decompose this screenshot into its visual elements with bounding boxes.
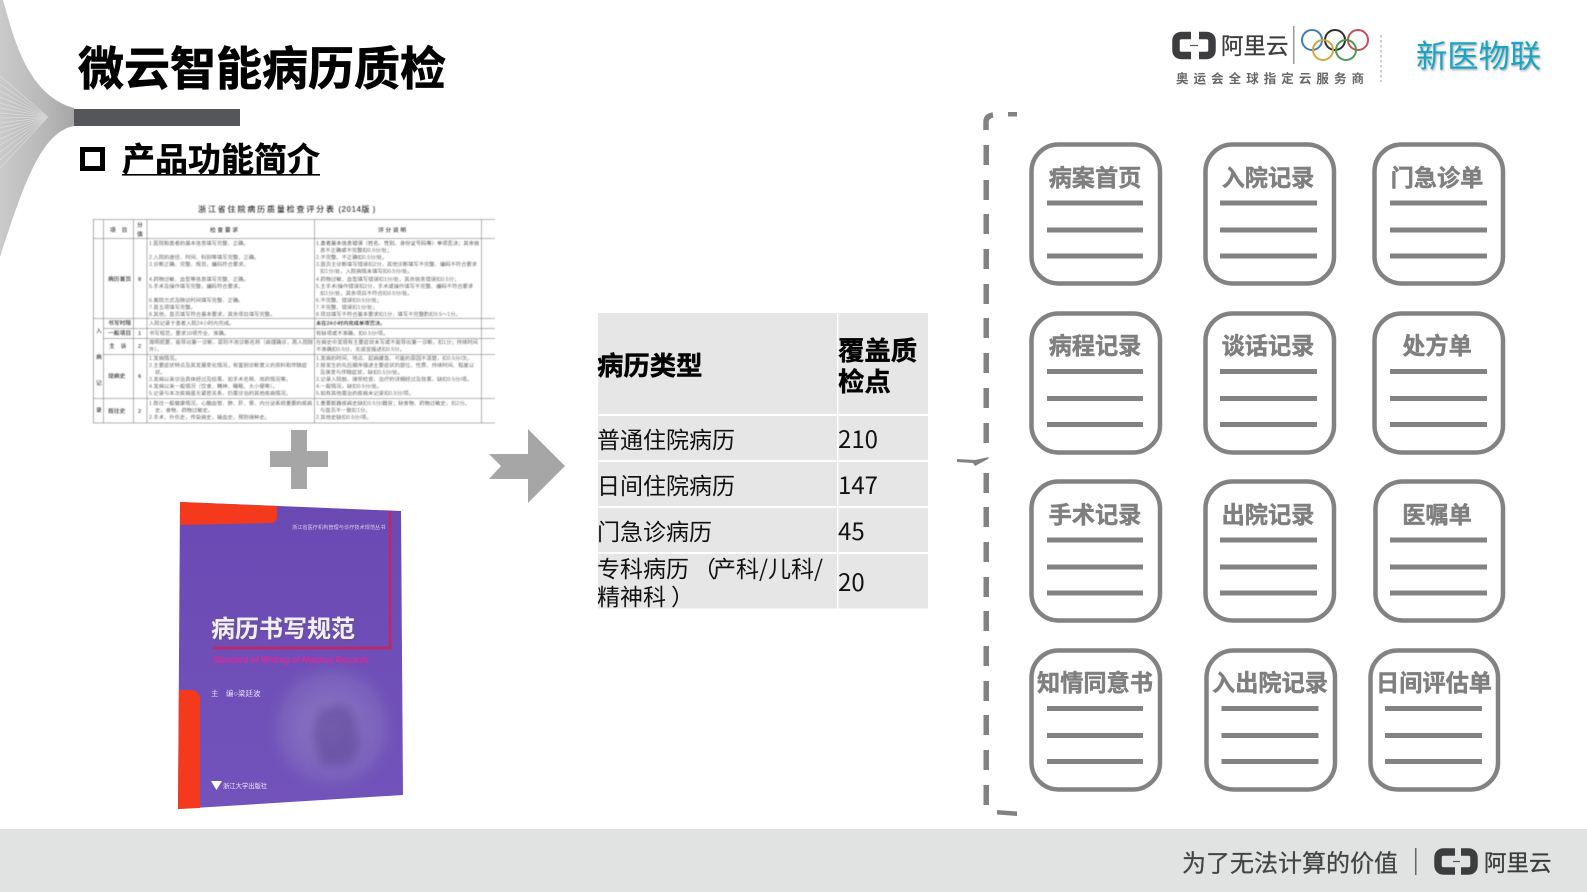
scanned table text: 状。 — [155, 368, 166, 376]
footer logo — [1438, 851, 1552, 876]
card: 手术记录: 手术记录 — [1049, 502, 1141, 528]
book editor: 主 编○梁廷波 — [211, 688, 261, 698]
scanned table text: 分 — [137, 221, 143, 229]
card: 处方单 — [1374, 314, 1503, 452]
scanned table text: 4.发病以来一般情况（饮食、精神、睡眠、大小便等）。 — [149, 382, 278, 390]
scanned table text: 及演变与伴随症状，缺扣0.5分/处。 — [320, 368, 403, 376]
scanned table text: 一般项目 — [108, 329, 131, 337]
logo divider — [1293, 26, 1294, 64]
book series text: 浙江省医疗机构管理与诊疗技术规范丛书 — [292, 523, 385, 531]
footer divider — [1415, 848, 1416, 875]
scanned table text: 扣1分/处，其余项目不符合扣0.5分/处。 — [320, 289, 413, 297]
scanned table text: 4.药物过敏、血型等信息填写完整、正确。 — [149, 275, 249, 283]
scanned table text: 2.手术、外伤史，传染病史，输血史，预防接种史。 — [149, 413, 270, 421]
scanned table text: 2.主要症状特点及其发展变化情况，有鉴别诊断意义的资料和伴随症 — [149, 361, 308, 369]
card: 门急诊单 — [1374, 144, 1503, 284]
card: 病程记录: 病程记录 — [1049, 333, 1141, 359]
card: 知情同意书: 知情同意书 — [1037, 670, 1153, 696]
table cell backgrounds — [598, 313, 928, 608]
table row: 普通住院病历 — [597, 420, 878, 455]
card: 出院记录 — [1206, 482, 1334, 620]
table row: 专科病历: 专科病历（产科/儿科/ — [597, 550, 823, 584]
book pink frame line — [213, 511, 390, 648]
scanned table text: 入 — [96, 328, 102, 335]
scanned table text: 项 目 — [110, 227, 127, 234]
card: 手术记录 — [1032, 482, 1160, 620]
scanned table text: 6.离院方式及随访时间填写完整、正确。 — [149, 296, 243, 304]
card: 日间评估单: 日间评估单 — [1376, 670, 1492, 696]
dotted divider — [1380, 35, 1382, 82]
table header: 病历类型 — [597, 344, 703, 383]
table row: 专科病历: 20 — [838, 563, 865, 598]
scanned table text: 病 — [96, 353, 102, 361]
scanned table text: 息不正确或不完整扣0.5分/处； — [320, 246, 392, 254]
card: 出院记录: 出院记录 — [1222, 502, 1314, 528]
scanned table text: 不准确扣0.5分，无适宜描述扣0.5分。 — [316, 345, 405, 353]
title underline bar — [74, 109, 240, 126]
scanned table text: 4.一般情况，缺扣0.5分/处。 — [316, 382, 382, 390]
book publisher — [211, 781, 268, 790]
scanned table text: 2 — [138, 409, 141, 415]
dashed bracket — [957, 112, 1017, 816]
decorative fan shape at top left — [0, 0, 74, 257]
footer bar — [0, 829, 1587, 892]
card: 入出院记录 — [1206, 650, 1335, 790]
scanned table text: 值 — [137, 230, 143, 238]
scanned table text: 1 — [138, 331, 142, 337]
card: 门急诊单: 门急诊单 — [1391, 165, 1483, 191]
card: 病案首页 — [1032, 144, 1160, 284]
scanned table text: 史，食物、药物过敏史。 — [155, 406, 213, 414]
scanned table text: 外）。 — [149, 345, 162, 353]
scanned table text: 记 — [96, 379, 102, 387]
table row: 专科病历: 精神科） — [597, 578, 694, 612]
scanned table text: 既往史 — [108, 407, 126, 415]
section heading: 产品功能简介 — [122, 141, 320, 178]
book cover — [178, 502, 404, 809]
scanned table text: 2.按发生的先后顺序描述主要症状的部位、性质、持续时间、程度以 — [316, 361, 475, 369]
table header: 检点 — [838, 360, 891, 399]
scanned table text: 1.重要脏器疾病史缺扣0.5分/器官；缺食物、药物过敏史，扣2分。 — [316, 399, 470, 407]
scanned table text: 未在24小时内完成单项否决。 — [316, 319, 385, 327]
scanned table text: 5.如有其他需治的疾病未记录扣0.5分/项。 — [316, 389, 414, 397]
scanned table text: 书写时限 — [108, 319, 131, 327]
scanned table text: 1.既往一般健康情况，心脑血管、肺、肝、肾、内分泌系统重要的疾病 — [149, 399, 313, 407]
card: 入院记录 — [1206, 144, 1334, 284]
card: 入出院记录: 入出院记录 — [1212, 670, 1328, 696]
footer logo: 阿里云 — [1484, 851, 1552, 876]
scanned table text: 书写规范，要求10项齐全、准确。 — [149, 329, 229, 337]
scanned table text: 入院记录于患者入院24小时内完成。 — [149, 319, 234, 327]
table row: 日间住院病历: 日间住院病历 — [597, 467, 735, 501]
scanned table text: 8.其他，首页填写符合基本要求，其余项目填写完整。 — [149, 310, 275, 318]
scanned table text: 7.不完整、错误扣1分/处； — [316, 303, 378, 311]
book background — [178, 502, 403, 809]
table header — [597, 329, 917, 399]
icon: plus sign — [270, 430, 328, 489]
scanned table text: 4.药物过敏、血型填写错误扣1分/处，其余信息错误扣0.5分； — [316, 275, 459, 283]
card: 医嘱单 — [1376, 482, 1503, 620]
coverage table — [597, 313, 928, 612]
scanned table text: 3.记录入院前、接受检查、治疗的详细经过及效果，缺扣0.5分/项。 — [316, 375, 472, 383]
card: 处方单: 处方单 — [1402, 333, 1472, 359]
brand name: 新医物联 — [1416, 39, 1541, 74]
scanned table text: 2.入院的途径、时间、科别等填写完整、正确。 — [149, 253, 259, 261]
icon: alibaba cloud bracket mark — [1176, 36, 1212, 56]
icon: olympic rings — [1302, 30, 1368, 60]
scanned table text: 3.发病以来诊治具体经过及结果，如手术名称、用药情况等。 — [149, 375, 291, 383]
table row: 专科病历 — [597, 550, 865, 612]
scanned table text: 简明扼要，能导出第一诊断，原则不用诊断名称（病理确诊，再入院除 — [149, 338, 314, 346]
scanned table text: 5.主手术/操作错误扣2分，手术或操作填写不完整、编码不符合要求 — [316, 282, 474, 290]
scanned table text: 5.记录与本次疾病虽无紧密关系、仍需诊治的其他疾病情况。 — [149, 389, 291, 397]
scanned table text: 与首页不一致扣1分。 — [320, 406, 371, 414]
book publisher: 浙江大学出版社 — [223, 781, 268, 790]
logo wordmark: 阿里云 — [1221, 34, 1289, 59]
scanned table title: 浙江省住院病历质量检查评分表 (2014版 ) — [198, 204, 376, 214]
table row: 门急诊病历: 门急诊病历 — [597, 513, 712, 547]
card: 日间评估单 — [1370, 650, 1498, 790]
table row: 日间住院病历: 147 — [838, 466, 878, 501]
scanned table text: 2.其他史缺扣0.5分/项。 — [316, 413, 372, 421]
alibaba cloud olympic logo — [1176, 26, 1369, 86]
table row: 日间住院病历 — [597, 466, 878, 501]
logo tagline: 奥运会全球指定云服务商 — [1176, 71, 1369, 86]
footer slogan: 为了无法计算的价值 — [1182, 850, 1398, 878]
scanned table text: 2.不完整、不正确扣0.5分/处。 — [316, 253, 388, 261]
book title: 病历书写规范 — [211, 616, 355, 643]
scanned table text: 评 分 说 明 — [378, 226, 406, 234]
card: 知情同意书 — [1032, 650, 1160, 790]
scanned table text: 在病史中发现有主要症状未写或不能导出第一诊断，扣1分；持续时间 — [316, 338, 478, 346]
card: 谈话记录 — [1206, 314, 1334, 452]
scanned table text: 6 — [138, 374, 142, 380]
book english title: Standard of Writing of Medical Records — [212, 655, 369, 666]
book red spine band — [178, 690, 200, 809]
scanned table text — [96, 221, 479, 421]
icon: hollow square bullet — [82, 150, 102, 168]
book red corner — [180, 502, 277, 525]
scanned table text: 3.诊断正确、完整、规范，编码符合要求。 — [149, 260, 249, 268]
scanned table text: 检 查 要 求 — [210, 226, 238, 234]
scanned table text: 病历首页 — [108, 275, 131, 283]
scanned table text: 1.发病情况。 — [149, 354, 180, 362]
table row: 普通住院病历: 普通住院病历 — [597, 421, 735, 455]
title: 微云智能病历质检 — [78, 43, 446, 95]
card: 病案首页: 病案首页 — [1049, 165, 1141, 191]
card: 入院记录: 入院记录 — [1222, 165, 1314, 191]
card: 病程记录 — [1032, 314, 1160, 452]
table header: 覆盖质 — [838, 329, 917, 368]
scanned table text: 扣1分/处，入院病情未填写扣0.5分/处。 — [320, 267, 413, 275]
card: 谈话记录: 谈话记录 — [1222, 333, 1314, 359]
arrow — [489, 429, 565, 503]
scanned table text: 3.首页主诊断填写错误扣2分，其他诊断填写不完整、编码不符合要求 — [316, 260, 478, 268]
scanned table text: 主 诉 — [109, 342, 127, 350]
scanned table text: 1.患者基本信息错误（姓名、性别、身份证号码等）单项否决；其余信 — [316, 239, 479, 247]
table row: 普通住院病历: 210 — [838, 420, 878, 455]
scanned table grid — [93, 219, 495, 423]
scanned table text: 1.医院和患者的基本信息填写完整、正确。 — [149, 239, 249, 247]
scanned table text: 现病史 — [108, 372, 126, 380]
scanned table text: 8 — [138, 277, 142, 283]
scanned table text: 2 — [138, 344, 141, 350]
book photo glow — [260, 655, 404, 799]
table row: 门急诊病历: 45 — [838, 512, 865, 547]
scanned table text: 有缺项或不准确，扣0.5分/项。 — [316, 329, 388, 337]
scanned table text: 6.不完整、错误扣0.5分/处； — [316, 296, 382, 304]
card: 医嘱单: 医嘱单 — [1402, 502, 1472, 528]
scanned table text: 1.发病的时间、地点、起病缓急、可能的原因不清楚，扣0.5分/次。 — [316, 354, 472, 362]
scanned table text: 录 — [96, 406, 102, 414]
scanned table text: 5.手术及操作填写完整，编码符合要求。 — [149, 282, 243, 290]
scanned scoring table — [93, 198, 495, 424]
table row: 门急诊病历 — [597, 512, 865, 547]
scanned table text: 7.首五项填写完整。 — [149, 303, 196, 311]
scanned table text: 8.项目填写不符合基本要求扣1分，填写不完整酌扣0.5～1分。 — [316, 310, 461, 318]
